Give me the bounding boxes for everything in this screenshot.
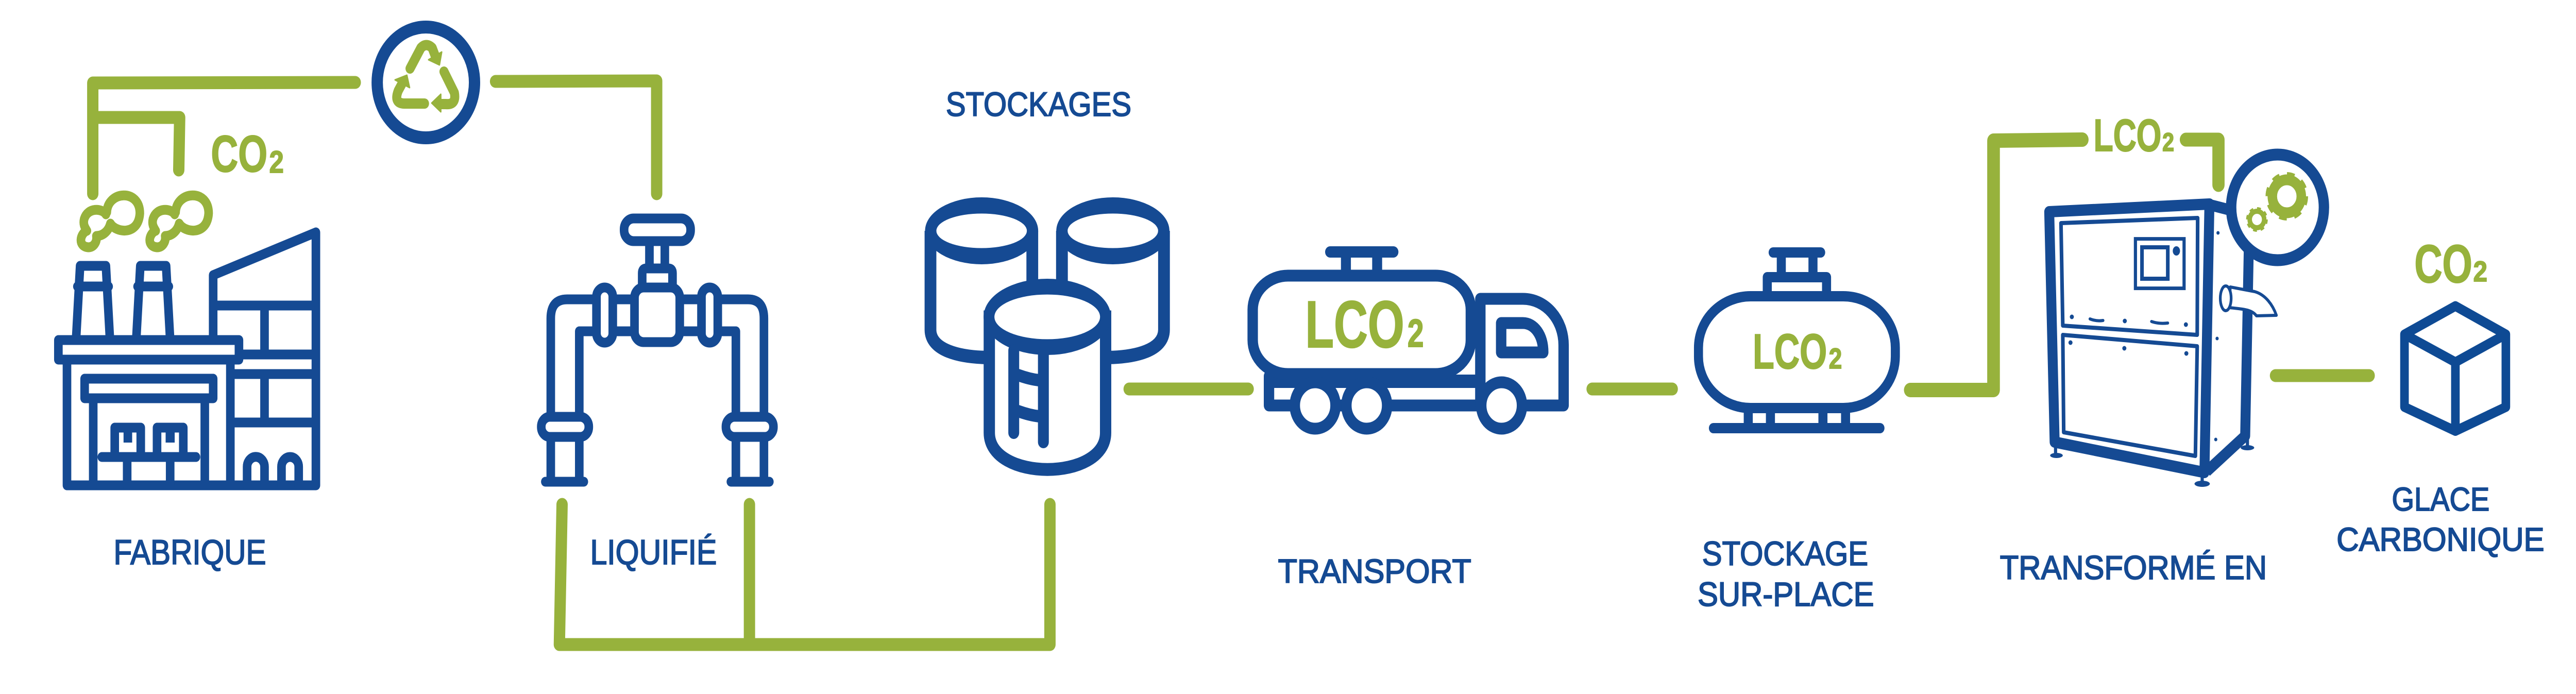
LCO2 on truck: LCO (1305, 287, 1404, 362)
green pipe: recycle to valve (496, 81, 657, 194)
chimneys (76, 266, 170, 340)
label: stockage sur-place (1698, 535, 1874, 614)
LCO2 label above machine: 2 (2162, 127, 2174, 157)
LCO2 on tank: LCO (1753, 324, 1827, 379)
gear circle (2231, 155, 2324, 260)
LCO2 on tank: 2 (1829, 343, 1842, 375)
label: glace carbonique (2336, 481, 2545, 558)
label: glace carbonique: CARBONIQUE (2336, 521, 2545, 558)
green pipe: truck to on-site tank (1592, 382, 1672, 396)
green pipe: tank to machine (1910, 140, 2082, 390)
label: stockage sur-place: SUR-PLACE (1698, 576, 1874, 614)
green pipe: factory to recycle (93, 82, 355, 194)
CO2 label at factory: 2 (269, 145, 284, 179)
icon: smoke clouds (81, 195, 209, 247)
factory roof band (58, 340, 239, 360)
CO2 label above cube: 2 (2473, 256, 2487, 288)
factory door and pallets (84, 379, 213, 485)
green pipe: valve to storage (560, 504, 1050, 645)
icon: storage tanks (925, 197, 1170, 469)
label: liquifié: LIQUIFIÉ (590, 532, 717, 572)
icon: valve (541, 218, 773, 482)
label: stockage sur-place: STOCKAGE (1702, 535, 1868, 573)
icon: dry ice cube (2404, 306, 2506, 431)
factory walls and grid (67, 232, 316, 485)
label: transformé en: TRANSFORMÉ EN (2000, 549, 2267, 586)
CO2 label above cube: CO (2414, 233, 2472, 294)
label: fabrique: FABRIQUE (113, 532, 266, 572)
machine feet (2056, 438, 2247, 484)
LCO2 on truck: 2 (1408, 312, 1424, 356)
icon: recycle circle (377, 27, 474, 138)
label: glace carbonique: GLACE (2392, 481, 2489, 518)
icon: on-site storage tank (1699, 252, 1895, 428)
factory arches (247, 457, 299, 485)
machine nozzle (2221, 286, 2276, 316)
green pipe: storage to truck (1129, 382, 1248, 396)
green pipe: into machine (2186, 140, 2218, 185)
LCO2 label above machine: LCO (2094, 110, 2161, 161)
label: transport: TRANSPORT (1278, 553, 1471, 590)
icon: dry ice machine (2049, 155, 2324, 487)
green pipe: machine to cube (2276, 369, 2369, 382)
label: stockages: STOCKAGES (946, 86, 1131, 124)
tank ladder (1014, 350, 1043, 442)
icon: factory (58, 232, 316, 485)
icon: tanker truck (1252, 252, 1564, 429)
CO2 label at factory: CO (211, 125, 267, 182)
